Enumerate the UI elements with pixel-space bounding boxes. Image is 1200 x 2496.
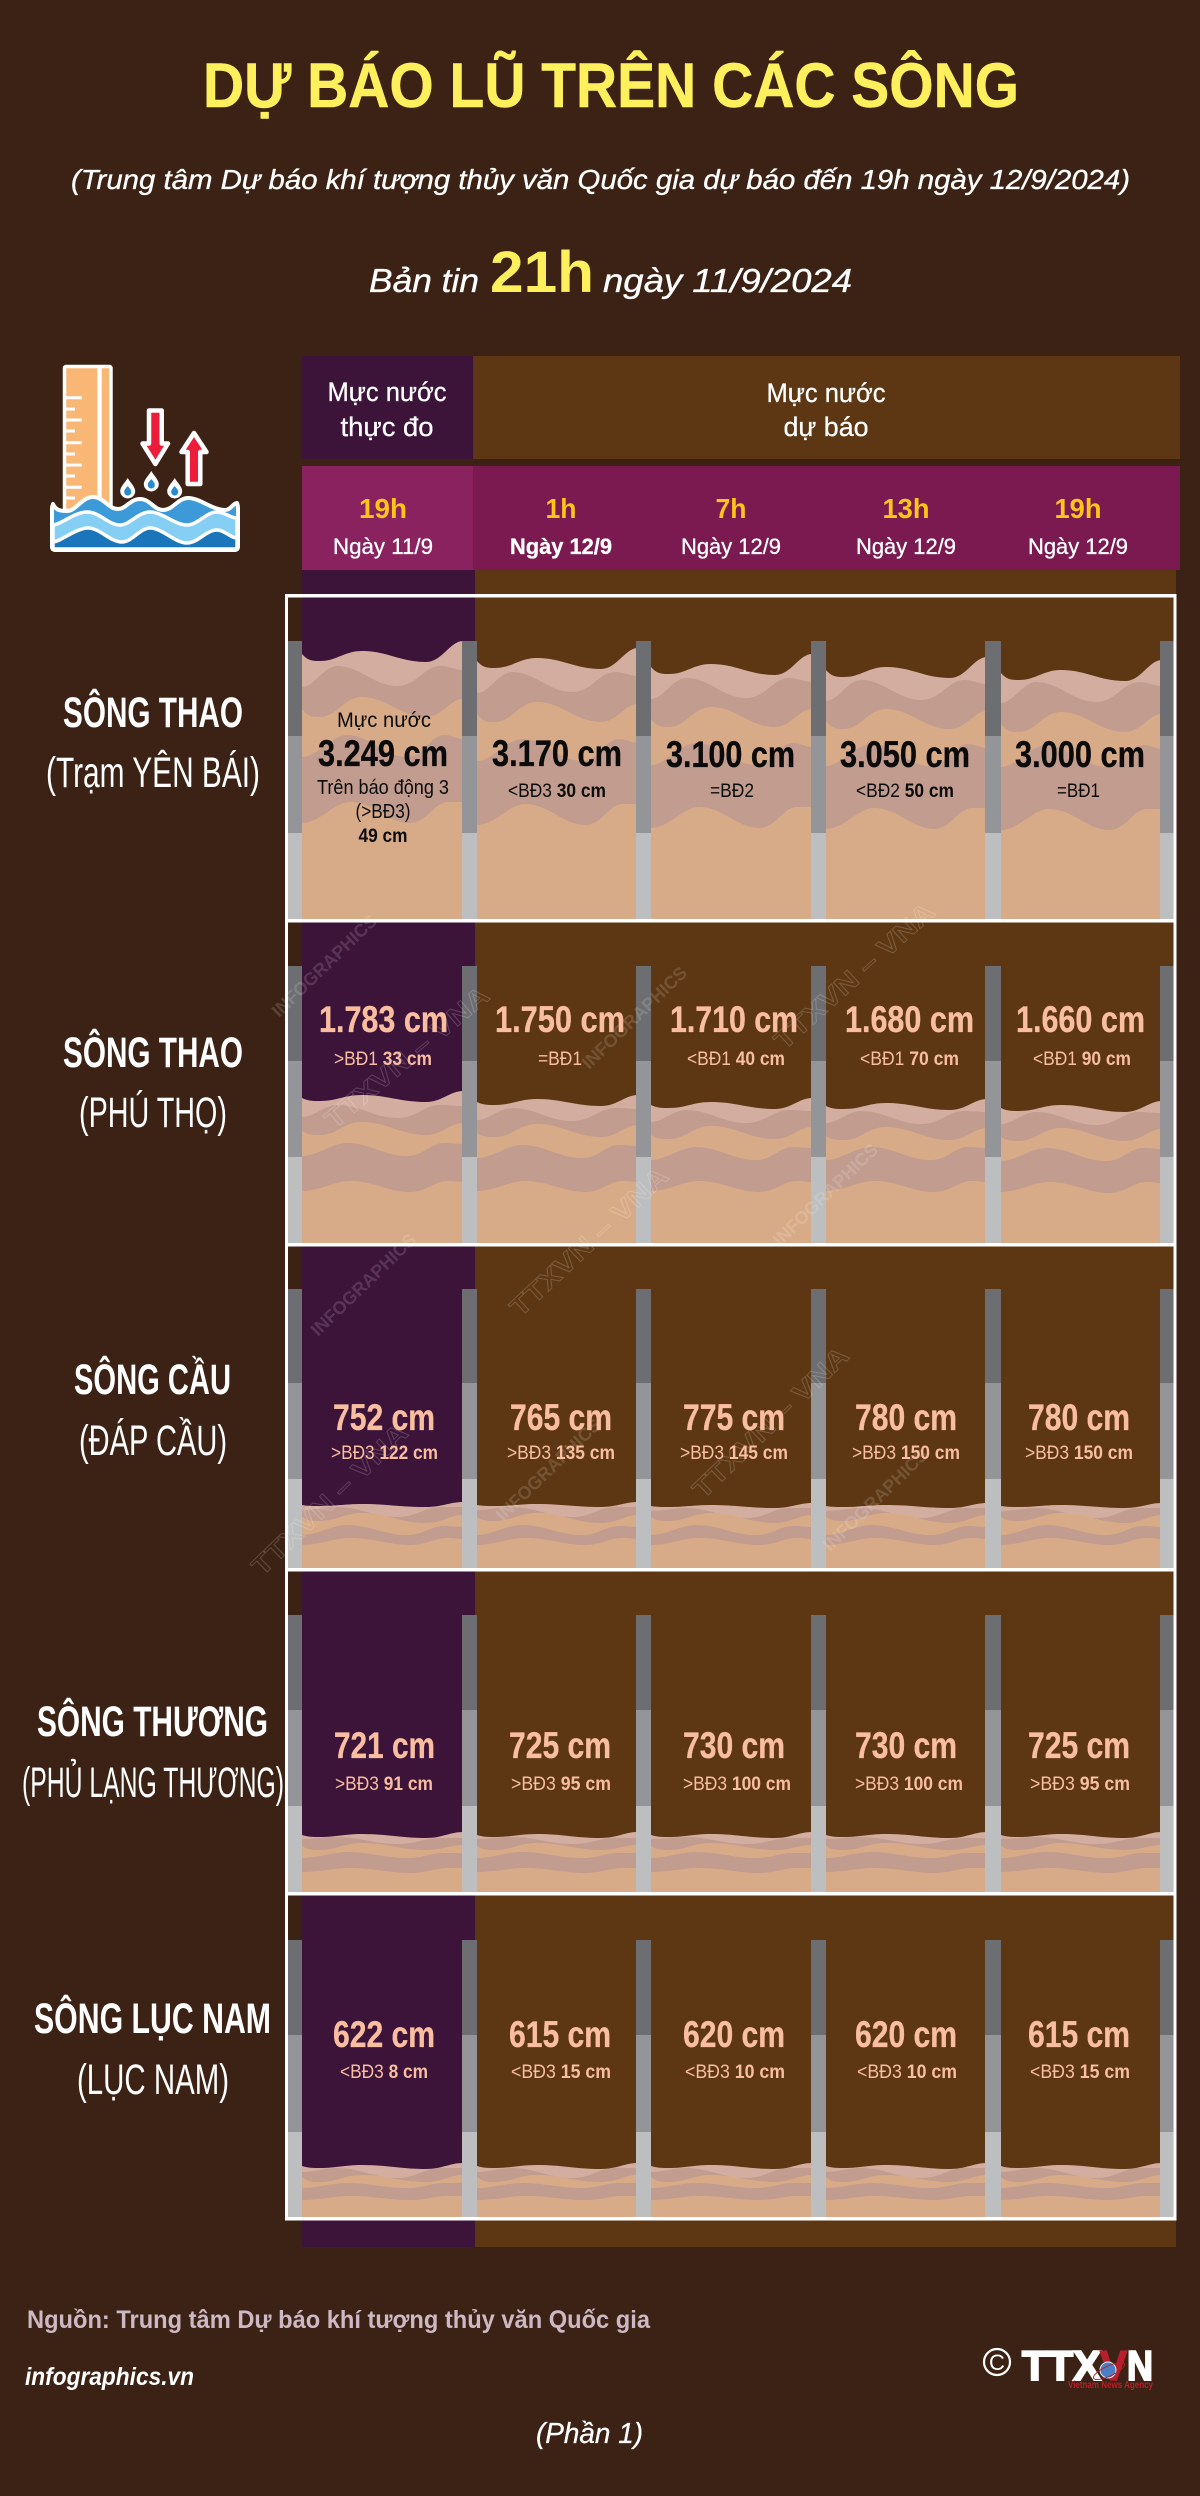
header: measured water level: thực đo	[340, 412, 434, 442]
row 2 values: =BĐ1	[538, 1049, 582, 1070]
row 2 values: <BĐ1 70 cm	[860, 1049, 959, 1070]
river label: Sông Thao Yên Bái	[46, 688, 260, 797]
logo: TTXVN: C	[989, 2350, 1005, 2375]
time header: forecast times: Ngày 12/9	[1028, 534, 1128, 559]
row 5 values: <BĐ3 10 cm	[685, 2062, 785, 2083]
row 2 values: 1.750 cm	[495, 999, 625, 1040]
panel: row 1 water layers	[302, 641, 1162, 946]
row 2 values: 1.680 cm	[845, 999, 974, 1040]
time header: 19h 11/9: Ngày 11/9	[333, 534, 433, 559]
row 3 values: >BĐ3 122 cm	[331, 1443, 438, 1464]
watermarks: TTXVN – VNA	[768, 896, 941, 1055]
river label: Sông Thao Phú Thọ: (PHÚ THỌ)	[79, 1089, 227, 1137]
river label: Sông Lục Nam: SÔNG LỤC NAM	[34, 1994, 271, 2043]
logo: TTXVN	[984, 2342, 1153, 2391]
source note: Nguồn: Trung tâm Dự báo khí tượng thủy văn Quốc gia	[27, 2306, 651, 2334]
bulletin time: ngày 11/9/2024	[603, 262, 852, 299]
header: forecast water level: Mực nước	[766, 378, 886, 408]
row 5 values: 620 cm	[855, 2014, 957, 2055]
river label: Sông Thao Phú Thọ: SÔNG THAO	[63, 1028, 243, 1077]
watermarks: INFOGRAPHICS	[307, 1230, 420, 1340]
measured column band	[302, 570, 475, 2247]
row 2 values: 1.710 cm	[670, 999, 798, 1040]
watermarks: INFOGRAPHICS	[819, 1445, 932, 1555]
watermarks: INFOGRAPHICS	[769, 1140, 882, 1250]
title: DỰ BÁO LŨ TRÊN CÁC SÔNG	[203, 50, 1019, 121]
river label: Sông Thương: (PHỦ LẠNG THƯƠNG)	[22, 1758, 284, 1807]
watermarks: TTXVN – VNA	[319, 980, 495, 1135]
watermarks: INFOGRAPHICS	[492, 1415, 605, 1525]
river label: Sông Thương	[22, 1697, 284, 1807]
river label: Sông Thương: SÔNG THƯƠNG	[37, 1697, 268, 1746]
gauge posts	[288, 597, 1174, 2217]
row 1 values: Trên báo động 3	[317, 777, 449, 799]
panel: row 3 water layers	[302, 1502, 1160, 1568]
row 1 values: 3.000 cm	[1015, 734, 1145, 775]
row 1 values: <BĐ2 50 cm	[856, 781, 954, 802]
time header: forecast times: 13h	[882, 493, 930, 524]
white table frame	[285, 594, 1176, 2220]
time header: 19h 11/9: 19h	[359, 493, 407, 524]
bulletin time	[369, 240, 852, 305]
watermarks: INFOGRAPHICS	[578, 963, 691, 1073]
header: measured water level	[302, 356, 473, 459]
logo: TTXVN: TTX	[1022, 2342, 1101, 2389]
bulletin time: 21h	[490, 240, 594, 305]
row 3 values: 775 cm	[683, 1397, 785, 1438]
row 5 values: <BĐ3 15 cm	[1030, 2062, 1130, 2083]
row 1 values: Mực nước	[337, 709, 431, 732]
panel: row 4 water layers	[302, 1832, 1160, 1892]
time header: forecast times: Ngày 12/9	[856, 534, 956, 559]
row 3 values	[331, 1397, 1133, 1464]
row 3 values: 752 cm	[333, 1397, 435, 1438]
row 1 values: 3.100 cm	[666, 734, 795, 775]
row 5 values	[333, 2014, 1130, 2083]
watermarks	[245, 896, 941, 1581]
river label: Sông Lục Nam	[34, 1994, 271, 2104]
row 5 values: 622 cm	[333, 2014, 435, 2055]
logo: TTXVN: N	[1127, 2342, 1153, 2389]
row 4 values: 725 cm	[1028, 1725, 1130, 1766]
row 4 values: 730 cm	[855, 1725, 957, 1766]
row 5 values: <BĐ3 8 cm	[340, 2062, 428, 2083]
river label: Sông Cầu: SÔNG CẦU	[74, 1355, 231, 1404]
row 5 values: 615 cm	[1028, 2014, 1130, 2055]
row 1 values: <BĐ3 30 cm	[508, 781, 606, 802]
row 3 values: 780 cm	[1028, 1397, 1130, 1438]
time header: forecast times: Ngày 12/9	[510, 534, 612, 559]
part label: (Phần 1)	[536, 2418, 643, 2450]
row 4 values: 730 cm	[683, 1725, 785, 1766]
row 1 values: =BĐ2	[710, 781, 754, 802]
row 2 values: <BĐ1 90 cm	[1033, 1049, 1131, 1070]
header: forecast water level: dự báo	[784, 412, 868, 442]
row 1 values: 3.249 cm	[318, 733, 448, 774]
row 3 values: >BĐ3 150 cm	[1025, 1443, 1133, 1464]
row 4 values: >BĐ3 100 cm	[855, 1774, 963, 1795]
row 1 values: (>BĐ3)	[356, 801, 410, 823]
bulletin time: Bản tin	[369, 262, 479, 299]
logo: TTXVN: Vietnam News Agency	[1068, 2380, 1153, 2391]
row 4 values: >BĐ3 95 cm	[511, 1774, 611, 1795]
river label: Sông Cầu	[74, 1355, 231, 1465]
row 3 values: >BĐ3 150 cm	[852, 1443, 960, 1464]
time header: forecast times: Ngày 12/9	[681, 534, 781, 559]
watermarks: TTXVN – VNA	[245, 1417, 414, 1581]
row 5 values: <BĐ3 10 cm	[857, 2062, 957, 2083]
row 1 values: 49 cm	[358, 826, 408, 847]
row 3 values: 765 cm	[510, 1397, 612, 1438]
row 2 values: 1.660 cm	[1016, 999, 1145, 1040]
watermarks: TTXVN – VNA	[686, 1340, 855, 1504]
river label: Sông Cầu: (ĐÁP CẦU)	[79, 1417, 227, 1465]
row 4 values: >BĐ3 100 cm	[683, 1774, 791, 1795]
time header: forecast times	[473, 466, 1180, 570]
icon: water level gauge	[52, 366, 238, 550]
row 1 values: =BĐ1	[1057, 781, 1100, 802]
forecast column band	[475, 570, 1176, 2247]
row 5 values: 620 cm	[683, 2014, 785, 2055]
panel: row 5 water layers	[302, 2163, 1160, 2217]
river label: Sông Thao Phú Thọ	[63, 1028, 243, 1137]
row 4 values: >BĐ3 91 cm	[335, 1774, 433, 1795]
website: infographics.vn	[25, 2363, 194, 2391]
row 3 values: 780 cm	[855, 1397, 957, 1438]
row 4 values: 725 cm	[509, 1725, 611, 1766]
row 2 values	[319, 999, 1145, 1070]
row 1 values: 3.050 cm	[840, 734, 970, 775]
row 1 values	[317, 709, 1145, 847]
row 5 values: <BĐ3 15 cm	[511, 2062, 611, 2083]
river label: Sông Lục Nam: (LỤC NAM)	[77, 2056, 229, 2104]
header: forecast water level	[473, 356, 1180, 459]
row 2 values: <BĐ1 40 cm	[687, 1049, 785, 1070]
row 1 values: 3.170 cm	[492, 733, 622, 774]
subtitle: (Trung tâm Dự báo khí tượng thủy văn Quốc gia dự báo đến 19h ngày 12/9/2024)	[71, 164, 1130, 195]
river label: Sông Thao Yên Bái: SÔNG THAO	[63, 688, 243, 737]
time header: 19h 11/9	[302, 466, 473, 570]
row 3 values: >BĐ3 145 cm	[680, 1443, 788, 1464]
logo: TTXVN: V	[1100, 2342, 1127, 2389]
row 5 values: 615 cm	[509, 2014, 611, 2055]
watermarks: INFOGRAPHICS	[268, 911, 381, 1021]
row 4 values: 721 cm	[334, 1725, 435, 1766]
row 3 values: >BĐ3 135 cm	[507, 1443, 615, 1464]
row 4 values: >BĐ3 95 cm	[1030, 1774, 1130, 1795]
river label: Sông Thao Yên Bái: (Trạm YÊN BÁI)	[46, 749, 260, 797]
watermarks: TTXVN – VNA	[504, 1160, 674, 1322]
panel: row 2 water layers	[302, 1091, 1160, 1243]
header: measured water level: Mực nước	[328, 377, 446, 407]
time header: forecast times: 19h	[1054, 493, 1102, 524]
time header: forecast times: 7h	[716, 493, 746, 524]
row 2 values: >BĐ1 33 cm	[334, 1049, 432, 1070]
row 4 values	[334, 1725, 1130, 1795]
time header: forecast times: 1h	[546, 493, 576, 524]
row 2 values: 1.783 cm	[319, 999, 448, 1040]
